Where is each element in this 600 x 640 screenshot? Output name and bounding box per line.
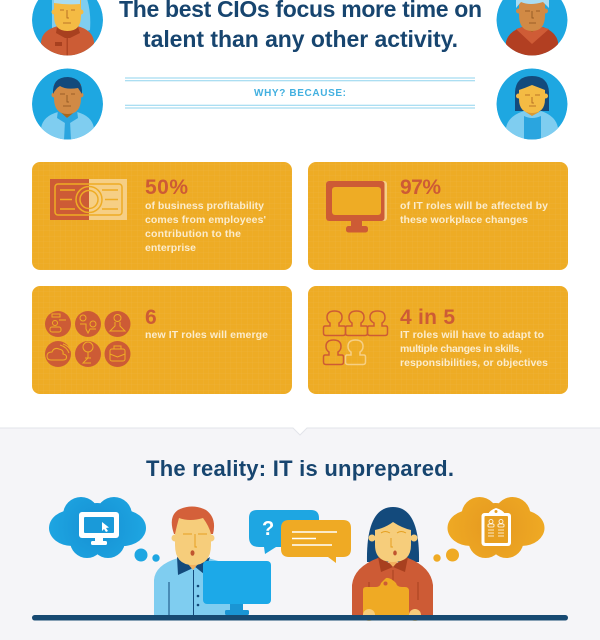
stat text <box>145 176 266 254</box>
speech bubble: question <box>249 510 319 554</box>
stat text <box>400 176 548 226</box>
computer monitor <box>203 561 271 615</box>
stat text: 4 in 5 <box>400 306 455 329</box>
panel: the reality <box>0 428 600 640</box>
stat text: contribution to the <box>145 228 241 240</box>
stat text: responsibilities, or objectives <box>400 357 548 369</box>
thought cloud: clipboard <box>433 497 544 562</box>
icons: six role badges <box>45 311 130 367</box>
panel: 50% profitability <box>32 162 292 270</box>
thought cloud: monitor <box>49 497 160 562</box>
stat text: IT roles will have to adapt to <box>400 329 544 341</box>
panel: 6 new IT roles <box>32 286 292 394</box>
stat text: 50% <box>145 176 188 199</box>
heading: The reality: IT is unprepared. <box>146 456 454 481</box>
avatar: woman in blue jacket <box>496 68 568 140</box>
woman with clipboard <box>352 507 433 621</box>
stat text: multiple changes in skills, <box>400 343 522 355</box>
stat text: 6 <box>145 306 157 329</box>
icon: banknote <box>50 179 127 220</box>
avatar: older man in red sweater <box>496 0 568 56</box>
avatar: man in orange shirt <box>32 0 103 56</box>
stat text <box>400 306 548 369</box>
stat text: enterprise <box>145 242 196 254</box>
stat text <box>145 306 268 341</box>
stat text: of business profitability <box>145 200 264 212</box>
why because banner <box>125 78 475 108</box>
stat text: comes from employees' <box>145 214 266 226</box>
title <box>119 0 482 52</box>
title: talent than any other activity. <box>143 26 458 52</box>
avatar: man in blue shirt <box>32 68 103 140</box>
icon: five people outlines <box>324 311 388 364</box>
icon: monitor <box>326 181 387 232</box>
desk <box>32 615 568 620</box>
speech bubble: question: ? <box>262 518 274 540</box>
stat text: new IT roles will emerge <box>145 329 268 341</box>
stat text: these workplace changes <box>400 214 528 226</box>
stat text: 97% <box>400 176 441 199</box>
speech bubble: text lines <box>281 520 351 563</box>
stat text: of IT roles will be affected by <box>400 200 548 212</box>
man at computer <box>154 506 232 615</box>
panel: 4 in 5 IT roles <box>308 286 568 394</box>
why because banner: WHY? BECAUSE: <box>254 88 346 99</box>
panel: 97% of IT roles <box>308 162 568 270</box>
